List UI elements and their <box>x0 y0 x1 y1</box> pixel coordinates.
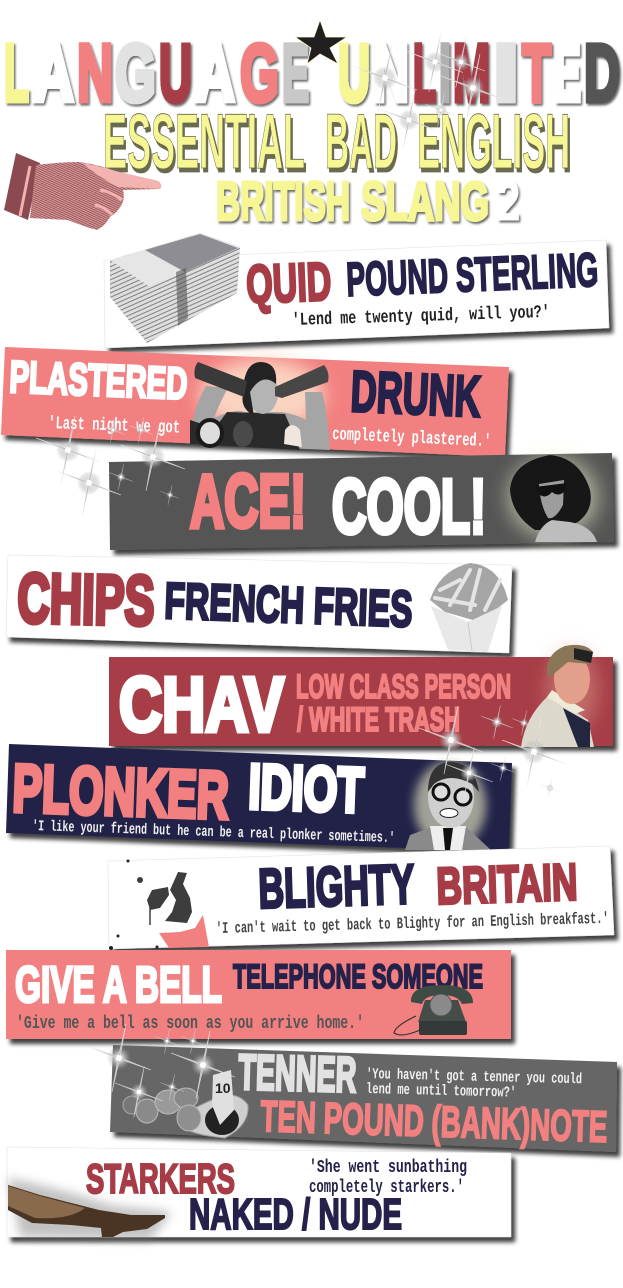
title: I <box>439 28 451 119</box>
subtitle: essential bad english: BAD <box>325 97 397 185</box>
word: blighty: BLIGHTY <box>257 852 415 920</box>
meaning: drunk: DRUNK <box>349 359 482 430</box>
photo: man in check cap <box>521 645 598 747</box>
sparkles: upper left <box>36 416 185 517</box>
banner: ace <box>109 453 614 550</box>
icon: coins and note in a drain: 10 <box>215 1080 231 1096</box>
title: U <box>159 28 192 119</box>
title: A <box>33 28 74 119</box>
word: plonker: PLONKER <box>11 751 230 834</box>
title: E <box>554 28 581 119</box>
subtitle: essential bad english: ESSENTIAL <box>103 97 305 185</box>
banner: blighty <box>108 846 614 950</box>
photo: man with glasses <box>405 761 492 851</box>
icon: pointing hand <box>4 153 161 230</box>
banner: quid <box>104 233 609 348</box>
example sentence: 'I like your friend but he can be a real plonker sometimes.' <box>32 818 395 847</box>
sparkles: title <box>353 32 505 150</box>
panel: give a bell background <box>6 950 511 1039</box>
title: U <box>338 28 370 119</box>
word: chav: CHAV <box>119 662 284 748</box>
title: G <box>115 28 156 119</box>
banner: plonker <box>6 744 512 852</box>
icon: rotary telephone <box>394 985 473 1035</box>
panel: plonker background <box>6 744 512 852</box>
panel: blighty background <box>108 846 614 949</box>
title: L <box>413 28 436 119</box>
word: starkers: STARKERS <box>86 1155 235 1202</box>
banner: chav <box>109 645 613 748</box>
meaning: white trash: / WHITE TRASH <box>297 701 460 739</box>
title: E <box>282 28 309 119</box>
title: N <box>77 28 113 119</box>
meaning: cool: COOL! <box>332 464 486 550</box>
example sentence end: completely plastered.' <box>332 425 491 452</box>
panel: starkers background <box>7 1147 511 1237</box>
sparkles: lower left <box>87 1024 235 1118</box>
icon: coins and note in a drain <box>123 1070 248 1138</box>
title: M <box>453 28 490 119</box>
panel: chav background <box>109 657 613 746</box>
icon: stack of banknotes <box>110 233 240 343</box>
panel: plastered background <box>1 347 509 457</box>
panel: chips background <box>6 555 512 653</box>
word: give a bell: GIVE A BELL <box>15 956 222 1013</box>
icon: paper cone of fries <box>430 563 508 652</box>
word: chips: CHIPS <box>17 559 155 640</box>
title <box>4 28 620 119</box>
sparkles: middle right <box>419 705 566 798</box>
banner: give a bell <box>6 950 511 1039</box>
meaning: naked / nude: NAKED / NUDE <box>189 1190 402 1239</box>
title: N <box>373 28 409 119</box>
panel: ace background <box>109 453 614 550</box>
banner: chips <box>6 555 512 653</box>
example sentence line 1: 'She went sunbathing <box>309 1158 467 1178</box>
title: A <box>195 28 235 119</box>
subtitle: british slang 2: SLANG <box>361 170 489 232</box>
banner: starkers <box>7 1147 511 1240</box>
word: ace: ACE! <box>190 459 306 543</box>
word: tenner: TENNER <box>238 1044 357 1103</box>
subtitle: british slang 2: 2 <box>497 170 520 232</box>
example sentence start: 'Last night we got <box>48 414 180 439</box>
word: quid: QUID <box>245 252 332 315</box>
title: T <box>522 28 551 119</box>
meaning: french fries: FRENCH FRIES <box>164 572 413 638</box>
banner: plastered <box>1 347 509 457</box>
meaning: telephone someone: TELEPHONE SOMEONE <box>233 958 483 996</box>
icon: map of britain <box>109 860 209 950</box>
photo: woman with bottles <box>190 359 330 450</box>
word: plastered: PLASTERED <box>9 351 189 409</box>
icon: black star <box>295 20 347 64</box>
banner: tenner <box>110 1044 617 1152</box>
example sentence line 2: lend me until tomorrow?' <box>366 1081 516 1102</box>
example sentence line 2: completely starkers.' <box>309 1178 464 1198</box>
title: G <box>240 28 279 119</box>
photo: bare leg <box>8 1178 172 1240</box>
title: L <box>4 28 29 119</box>
panel: quid background <box>104 240 609 348</box>
title: I <box>493 28 519 119</box>
example sentence: 'Give me a bell as soon as you arrive home.' <box>16 1014 364 1034</box>
panel: tenner background <box>110 1045 617 1152</box>
photo: woman with sunglasses <box>507 455 599 542</box>
subtitle: british slang 2: BRITISH <box>216 170 350 232</box>
meaning: idiot: IDIOT <box>248 752 365 826</box>
